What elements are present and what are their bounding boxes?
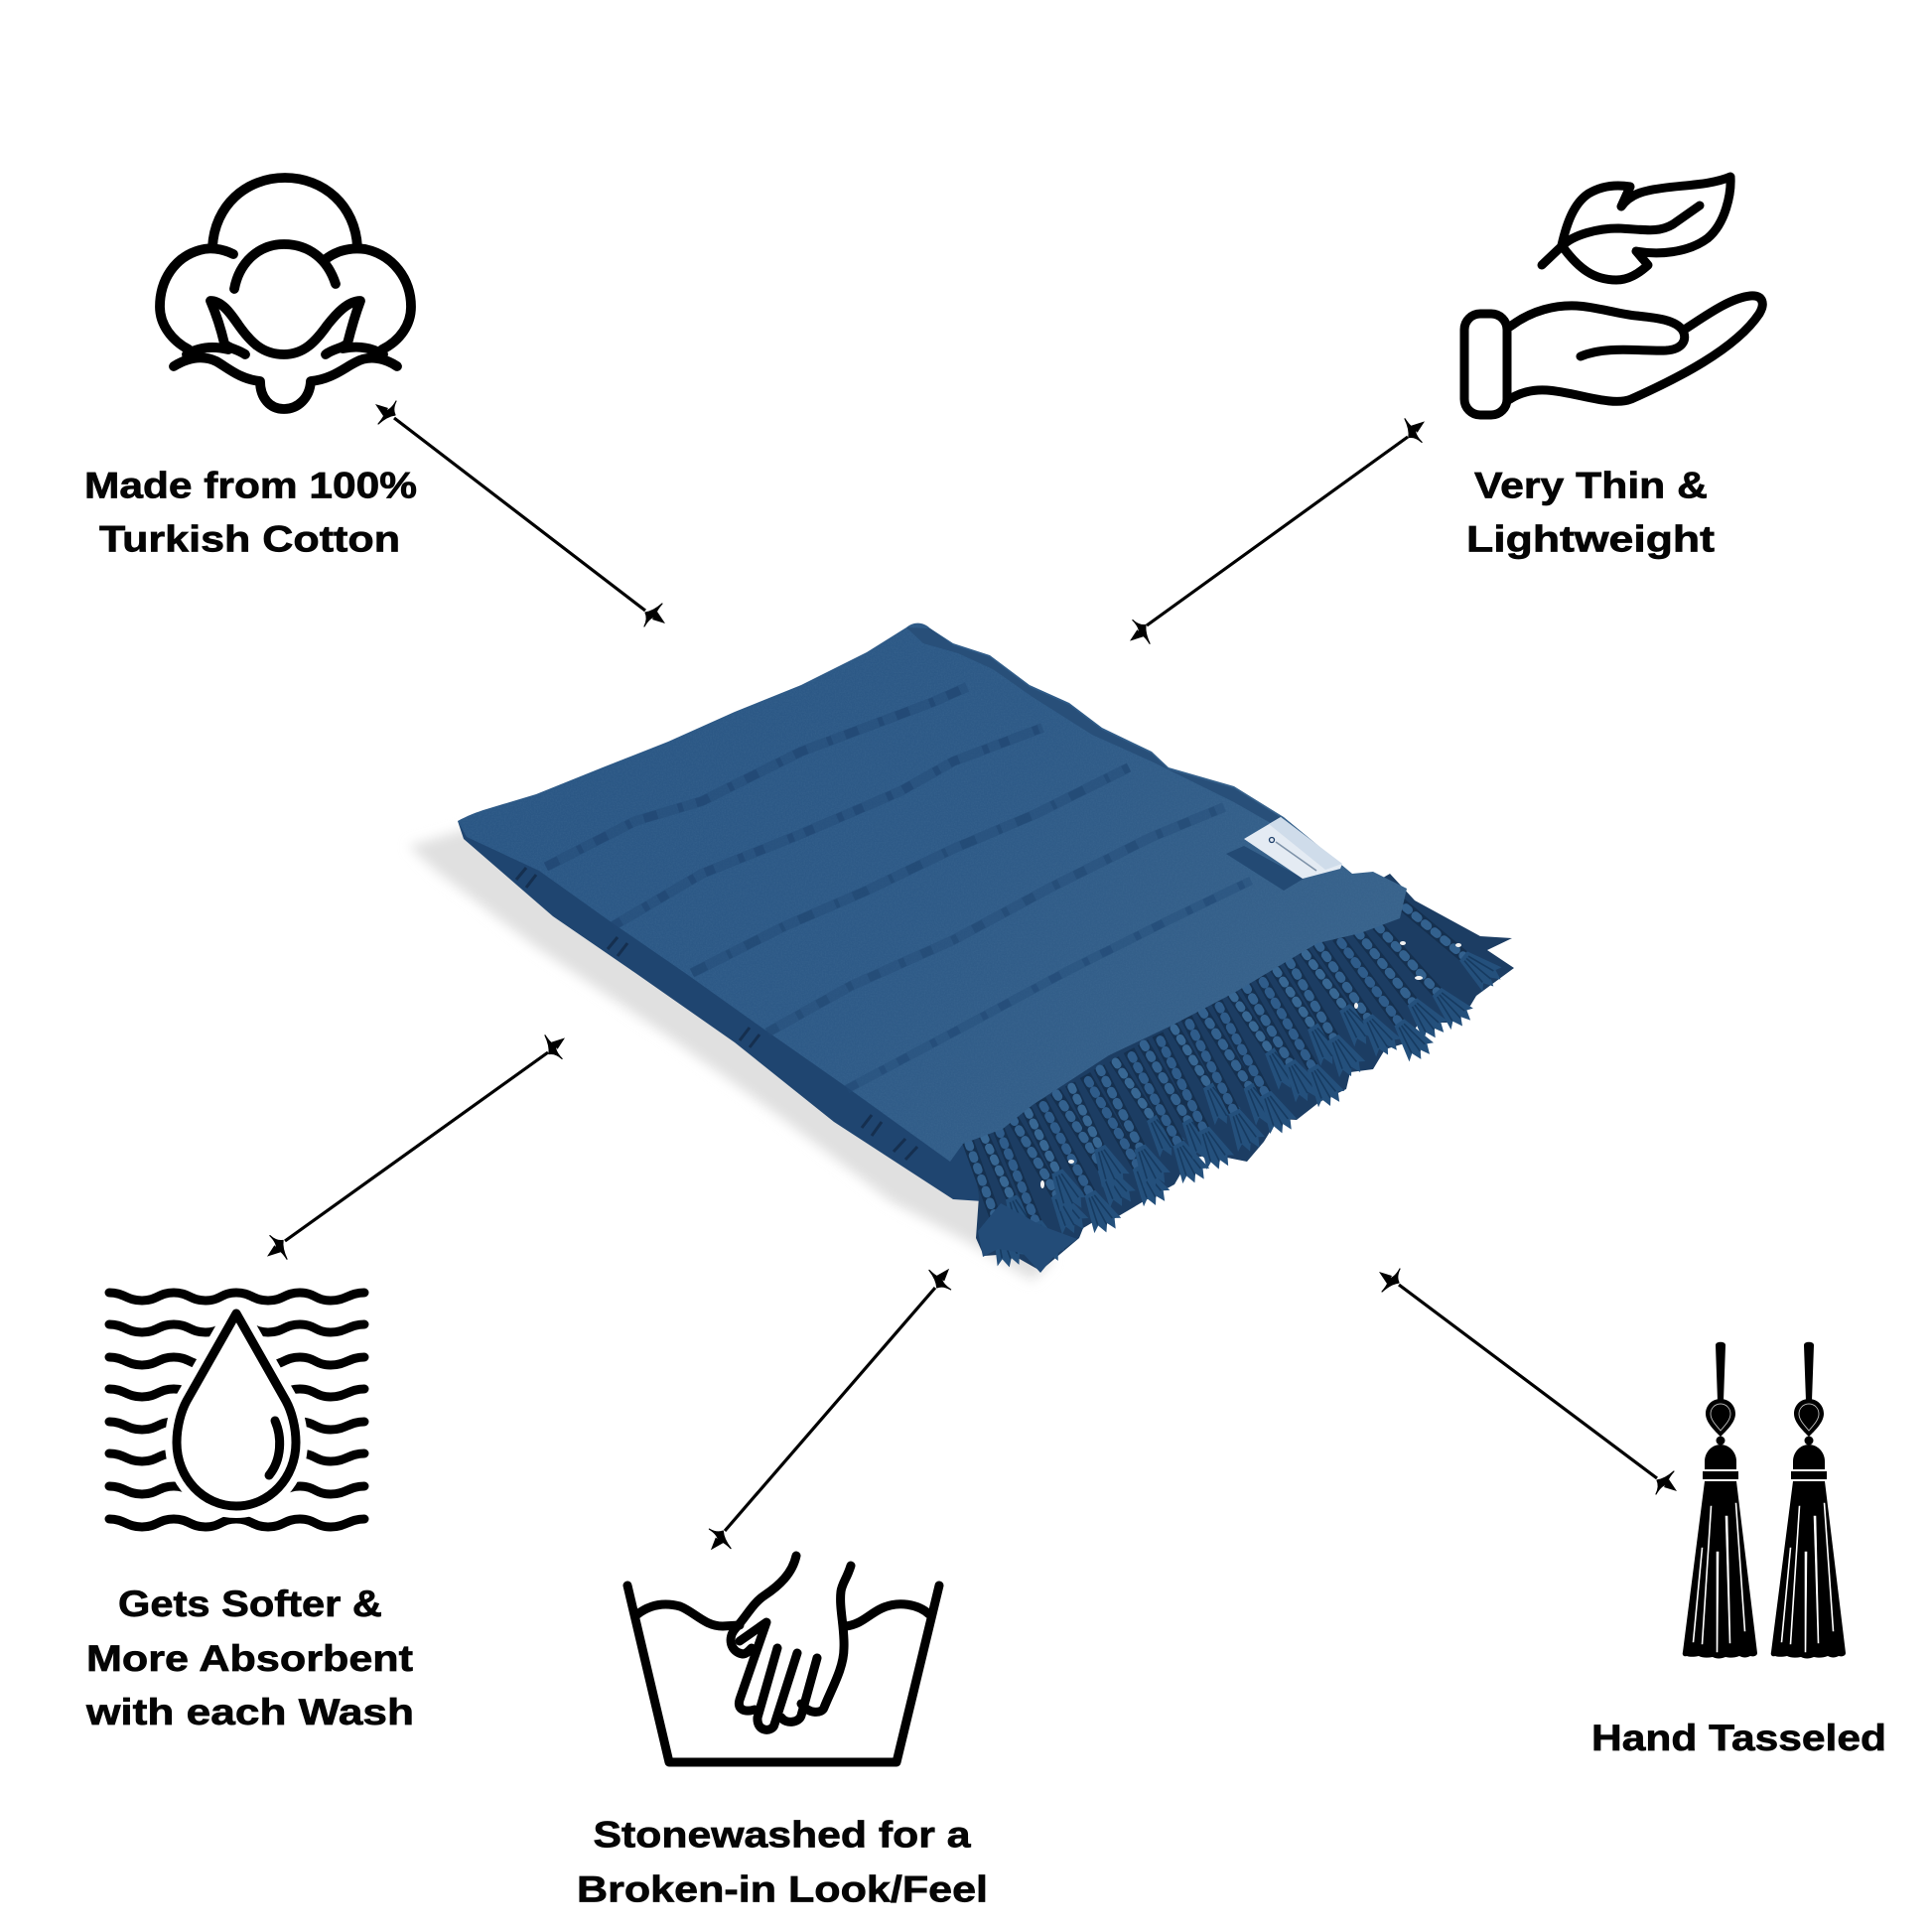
- panel: Turkish cotton: [84, 178, 417, 560]
- label: stonewashed: [577, 1815, 988, 1910]
- towel cast shadow: [409, 829, 1052, 1281]
- arrow: cotton to towel: [375, 401, 665, 626]
- label: cotton: [84, 465, 417, 560]
- fringe: large corner tassel: [978, 1203, 1077, 1273]
- panel: softer and absorbent: [85, 1293, 414, 1732]
- arrow: absorbent to towel: [264, 1033, 568, 1262]
- arrow: tasseled to towel: [1379, 1269, 1677, 1494]
- icon: hand washing basin: [627, 1556, 939, 1762]
- icon: water drop and waves: [109, 1293, 364, 1527]
- label: lightweight: Very Thin &: [1474, 465, 1708, 506]
- towel care label: [1226, 817, 1342, 891]
- label: cotton: Turkish Cotton: [99, 518, 400, 560]
- label: cotton: Made from 100%: [84, 465, 417, 506]
- panel: thin and lightweight: [1464, 177, 1762, 560]
- label: lightweight: Lightweight: [1466, 518, 1715, 560]
- label: stonewashed: Stonewashed for a: [594, 1815, 971, 1855]
- icon: cotton boll: [160, 178, 411, 409]
- panel: stonewashed: [577, 1556, 988, 1910]
- label: lightweight: [1466, 465, 1715, 560]
- icon: leaf over hand: [1464, 177, 1762, 415]
- label: tasseled: Hand Tasseled: [1591, 1718, 1886, 1758]
- label: softer: More Absorbent: [86, 1638, 413, 1679]
- fringe gaps: [1040, 941, 1461, 1188]
- label: stonewashed: Broken-in Look/Feel: [577, 1868, 988, 1910]
- towel top surface: [458, 623, 1407, 1162]
- towel fringe: [954, 874, 1514, 1273]
- panel: hand tasseled: [1591, 1343, 1886, 1758]
- label: softer: Gets Softer &: [118, 1584, 382, 1624]
- arrow: stonewashed to towel: [708, 1267, 952, 1552]
- towel woven stripes: [546, 687, 1251, 1089]
- arrow: lightweight to towel: [1127, 416, 1428, 646]
- panel: product towel: [409, 623, 1514, 1281]
- label: softer: with each Wash: [85, 1692, 414, 1732]
- label: softer: [85, 1584, 414, 1732]
- icon: two tassels: [1683, 1343, 1846, 1658]
- towel folded side: [458, 819, 1008, 1201]
